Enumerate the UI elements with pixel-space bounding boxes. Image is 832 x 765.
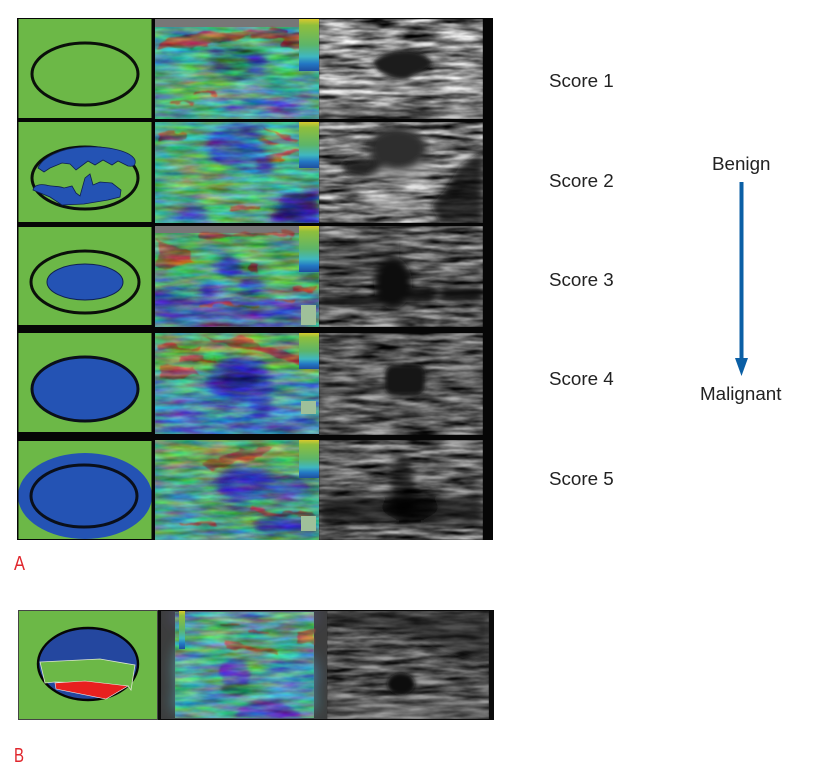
colour scale bar <box>299 440 319 478</box>
ultrasound: panel B <box>327 611 489 719</box>
colour scale bar <box>179 611 185 649</box>
row 2: score 2 images <box>18 122 483 225</box>
scale markers <box>301 305 316 325</box>
label: Score 4: Score 4 <box>549 368 614 389</box>
elastogram: panel B <box>161 611 327 719</box>
schematic: three-colour pattern <box>18 610 158 720</box>
panel B background <box>18 610 494 720</box>
label: Score 5: Score 5 <box>549 468 614 489</box>
ultrasound: score 5 <box>319 440 483 540</box>
scale markers <box>301 401 316 414</box>
mass <box>385 365 425 395</box>
schematic: score 5 <box>18 441 152 539</box>
row 5: score 5 images <box>18 440 483 540</box>
label: Benign: Benign <box>712 153 770 174</box>
row 4: score 4 images <box>18 333 483 435</box>
schematic: score 3 <box>18 227 152 325</box>
schematic: score 1 <box>18 19 152 118</box>
elastogram: score 4 <box>155 333 319 434</box>
label: Malignant: Malignant <box>700 383 782 404</box>
mass <box>387 673 415 695</box>
elastogram: score 1 <box>155 19 319 119</box>
colour scale bar <box>299 333 319 369</box>
colour scale bar <box>299 122 319 168</box>
schematic: score 4 <box>18 333 152 432</box>
colour scale bar <box>299 226 319 272</box>
row 1: score 1 images <box>18 19 483 119</box>
mass <box>373 51 431 79</box>
ultrasound: score 4 <box>319 333 483 435</box>
scale markers <box>301 516 316 531</box>
elastogram: score 2 <box>155 122 319 223</box>
elastogram: score 5 <box>155 440 319 540</box>
label: Score 1: Score 1 <box>549 70 614 91</box>
panel A background <box>17 18 493 540</box>
label: Score 2: Score 2 <box>549 170 614 191</box>
panel B: score example <box>18 610 494 720</box>
panel A: elasticity score table <box>17 18 493 540</box>
ultrasound: score 1 <box>319 19 483 119</box>
schematic: score 2 <box>18 122 152 222</box>
ultrasound: score 2 <box>319 122 483 223</box>
panel letter A: A <box>14 553 26 575</box>
row 3: score 3 images <box>18 226 483 327</box>
label: Score 3: Score 3 <box>549 269 614 290</box>
elastogram: score 3 <box>155 226 319 327</box>
colour scale bar <box>299 19 319 71</box>
arrow: benign to malignant <box>735 182 748 376</box>
ultrasound: score 3 <box>319 226 483 327</box>
